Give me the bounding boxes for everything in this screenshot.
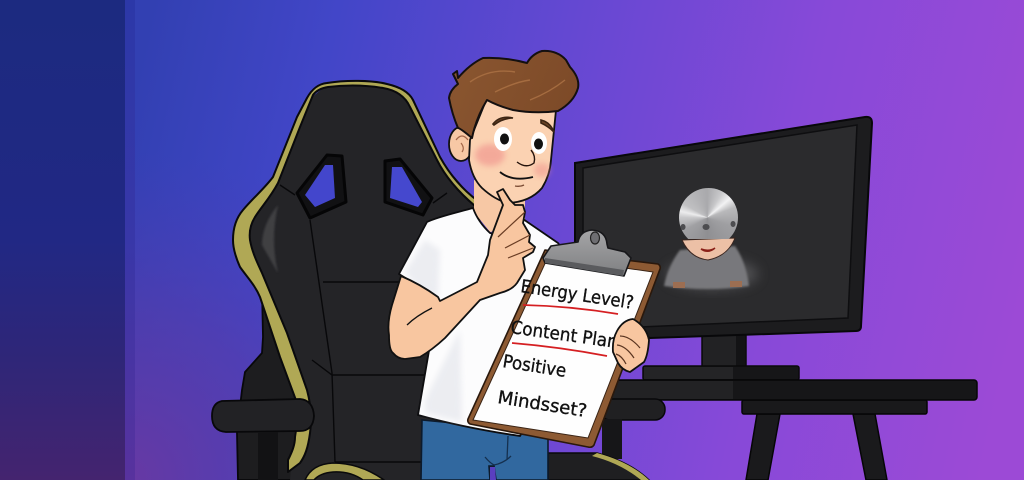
helmet rivets (681, 221, 736, 230)
desk legs (746, 414, 887, 480)
left eye (494, 127, 512, 151)
checklist item: Content Plan: Content Plan (509, 317, 619, 353)
clip body (543, 230, 631, 276)
desk (605, 380, 977, 480)
right eyebrow (541, 120, 554, 132)
right hand holding clipboard (613, 319, 649, 372)
hair (449, 51, 578, 138)
left armrest (212, 399, 314, 432)
seat right (548, 453, 649, 480)
computer monitor (575, 117, 872, 380)
ear detail (456, 136, 468, 152)
face (469, 98, 556, 203)
smile (500, 172, 533, 179)
right slot opening (390, 167, 422, 207)
cheeks (475, 144, 505, 166)
ear (449, 127, 473, 161)
checklist item: Energy Level?: Energy Level? (519, 276, 635, 314)
red underline 1 (523, 305, 618, 314)
checklist item: Positive: Positive (501, 351, 568, 382)
jeans (421, 420, 548, 480)
clip hole (590, 232, 600, 244)
seams (280, 185, 447, 462)
monitor screen (583, 125, 857, 327)
paper (473, 257, 653, 438)
checklist item: Mindsset?: Mindsset? (496, 387, 588, 422)
monitor frame (575, 117, 872, 338)
clip lower edge (545, 258, 624, 276)
face (682, 238, 735, 260)
right cheek (534, 163, 550, 177)
helmet (679, 188, 739, 239)
metal clip (543, 230, 631, 276)
nose (517, 150, 535, 166)
left arm and thinking hand (388, 189, 535, 359)
desk shelf (742, 400, 927, 414)
monitor stand neck (702, 333, 746, 368)
purple gap between legs (490, 467, 496, 480)
lower lip (515, 185, 524, 186)
hands (673, 281, 742, 288)
jeans fly seam (485, 436, 511, 465)
gaming chair (212, 81, 665, 480)
desk top (605, 380, 977, 400)
side bolster highlight (262, 205, 278, 273)
mouth (701, 248, 715, 251)
red underline 2 (512, 343, 607, 356)
yellow trim (233, 81, 478, 472)
seat trim left (305, 463, 384, 480)
glow (666, 259, 758, 289)
seat right trim (592, 453, 649, 480)
right eye (531, 132, 547, 154)
white t-shirt (399, 208, 600, 436)
person (388, 51, 600, 480)
on-screen helmeted figure (664, 188, 758, 289)
hair highlights (470, 71, 565, 100)
right armrest (600, 399, 665, 420)
right arm post (602, 419, 622, 459)
chair back upholstery (240, 85, 520, 480)
body (664, 246, 749, 289)
hand shape (613, 319, 649, 372)
left eyebrow (493, 117, 513, 125)
shirt shading (405, 240, 462, 422)
arm crease (407, 308, 432, 325)
arm post (258, 432, 278, 480)
clipboard board (468, 250, 660, 447)
finger lines (616, 336, 640, 364)
neck (474, 180, 525, 232)
clipboard (468, 230, 660, 447)
monitor stand base (643, 366, 799, 380)
right headrest slot (385, 159, 432, 215)
finger lines (498, 212, 533, 258)
left side wing (237, 290, 320, 480)
left slot opening (305, 165, 335, 207)
left headrest slot (297, 155, 346, 218)
